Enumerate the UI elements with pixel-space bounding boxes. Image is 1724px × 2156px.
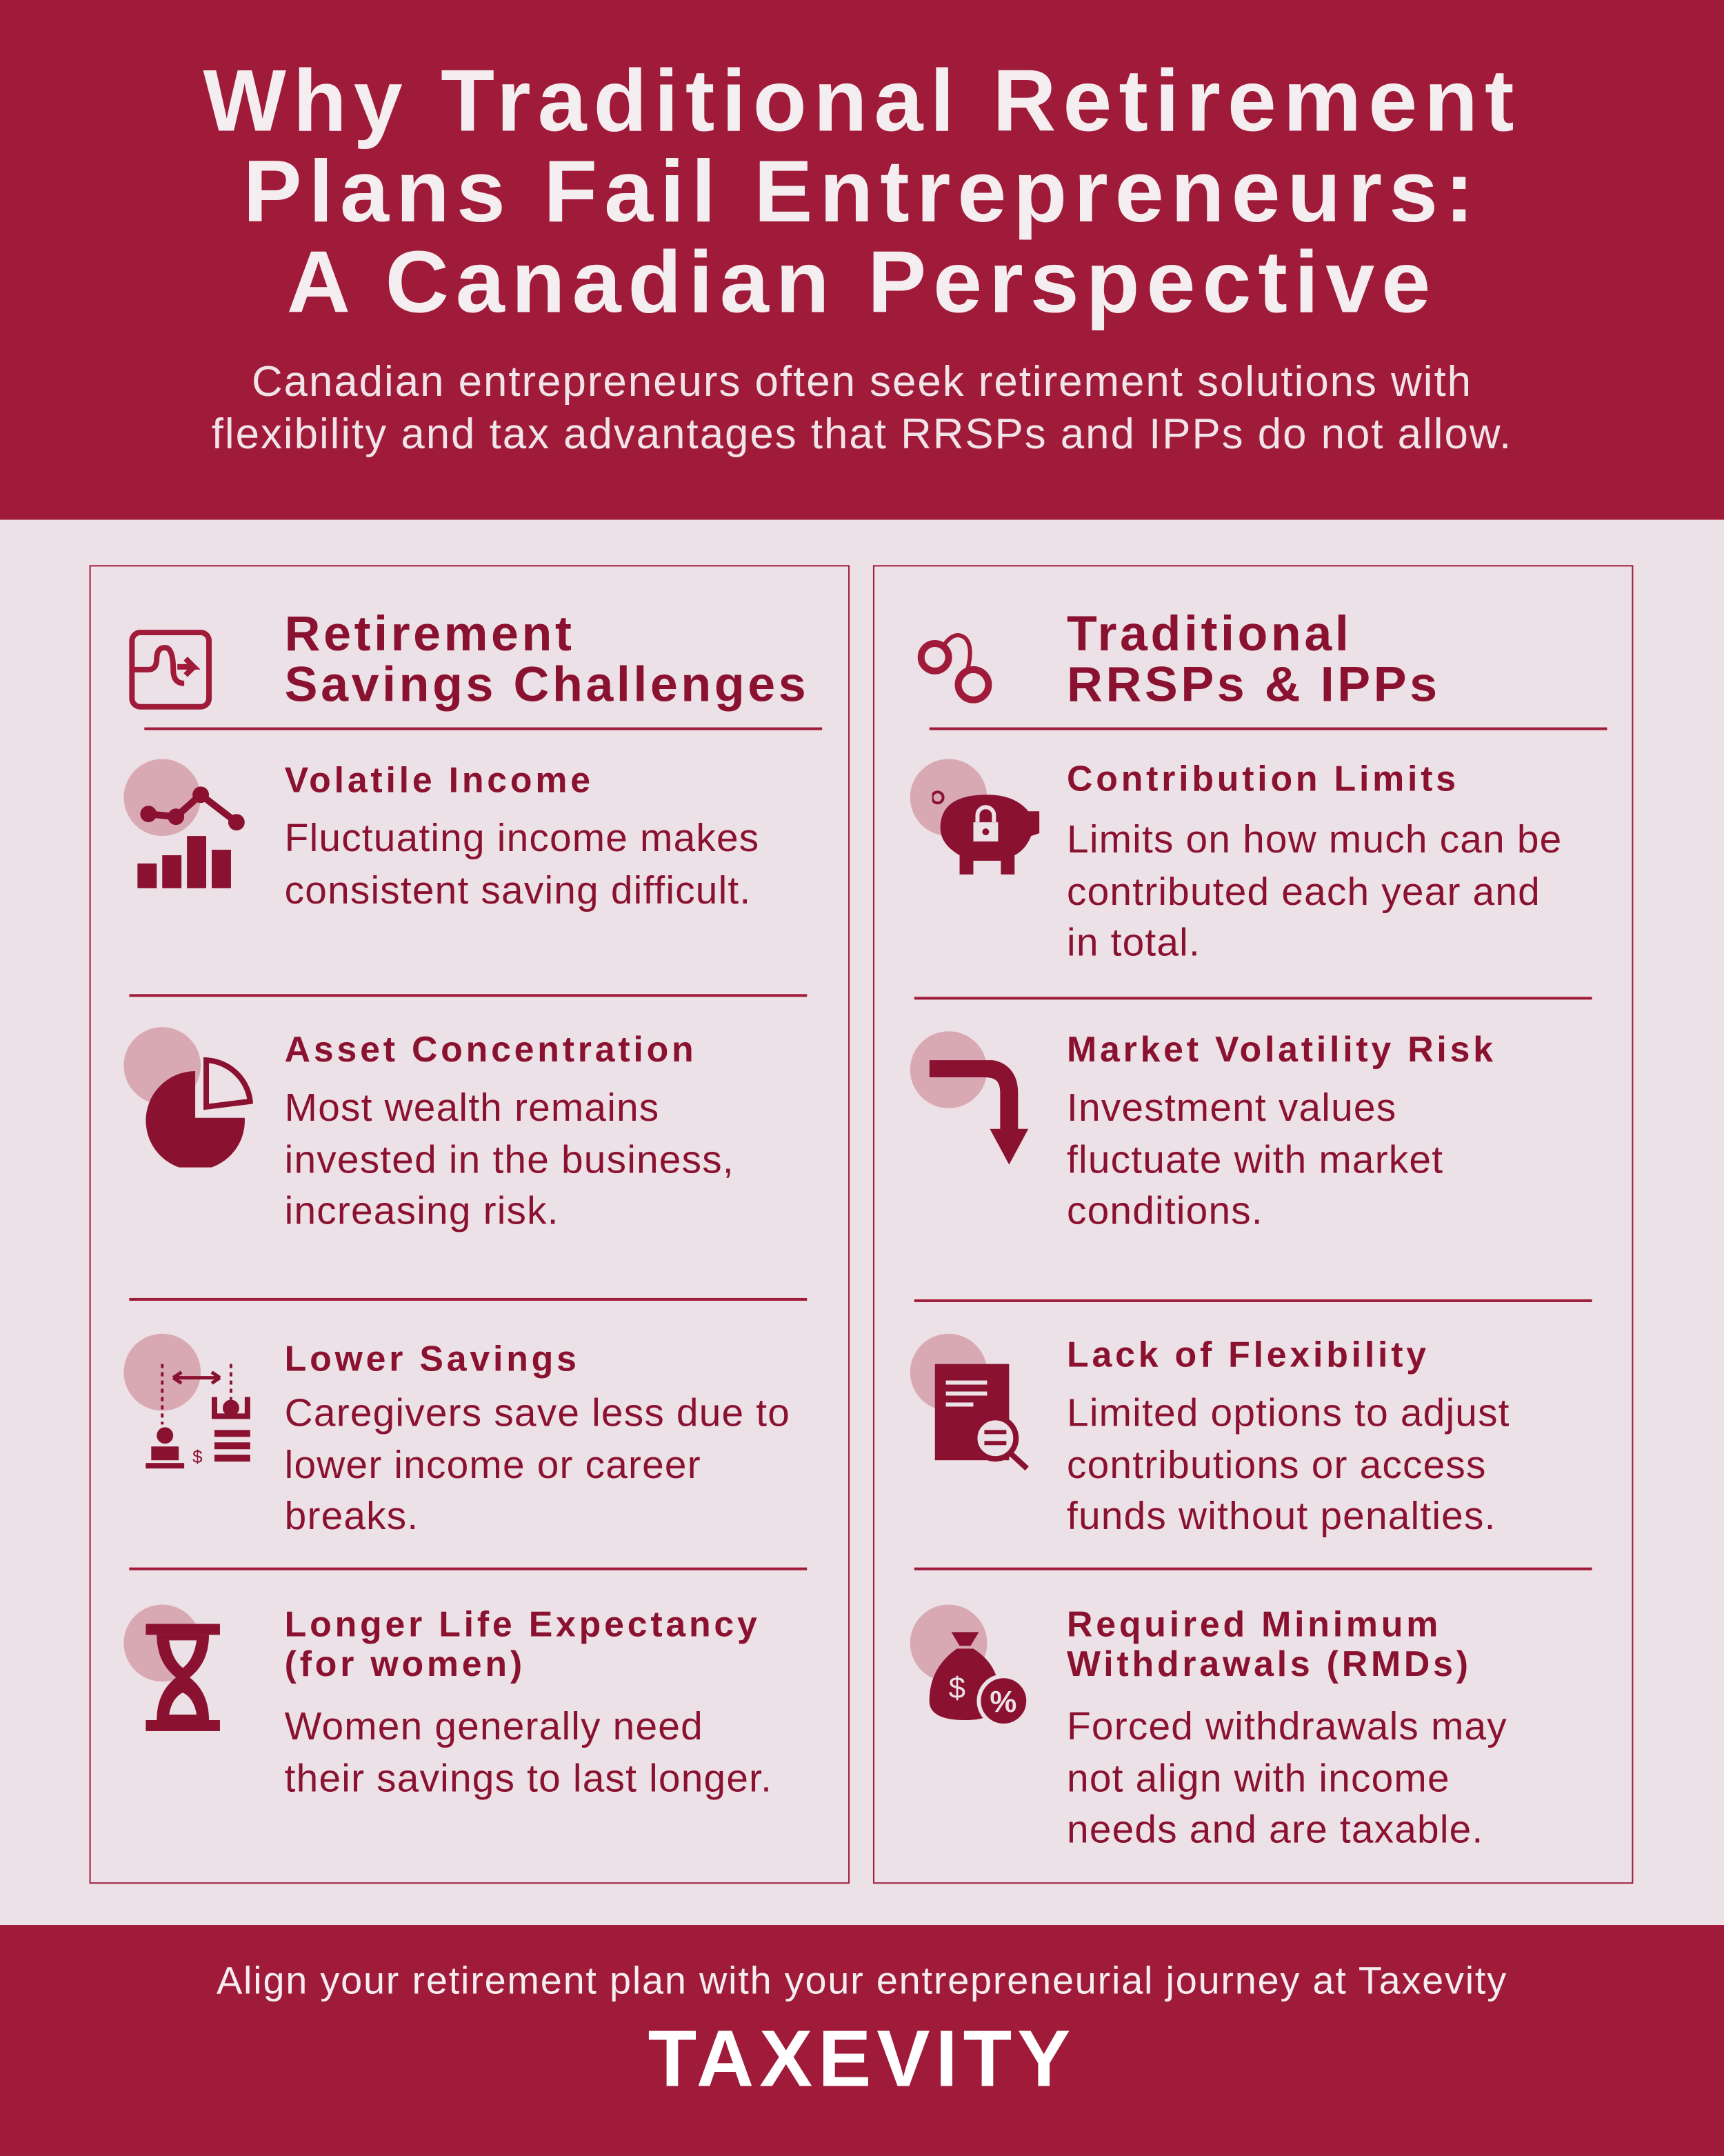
item: required minimum withdrawals: Required Minimum [1067, 1604, 1441, 1644]
item: lack of flexibility: contributions or access [1067, 1443, 1487, 1487]
subtitle: flexibility and tax advantages that RRSPs and IPPs do not allow. [212, 410, 1512, 458]
item: asset concentration: Asset Concentration [285, 1028, 697, 1070]
panel: traditional RRSPs & IPPs [873, 565, 1633, 1884]
icon: people income gap: $ [192, 1448, 203, 1467]
item: contribution limits: in total. [1067, 921, 1201, 966]
item: required minimum withdrawals: Withdrawals (RMDs) [1067, 1643, 1472, 1684]
subtitle: Canadian entrepreneurs often seek retirement solutions with [252, 357, 1472, 406]
item: lower savings: lower income or career [285, 1443, 701, 1487]
item: lower savings [123, 1334, 790, 1539]
item: asset concentration: increasing risk. [285, 1189, 559, 1233]
item: contribution limits: contributed each year and [1067, 870, 1541, 914]
footer band [0, 1925, 1724, 2156]
item: asset concentration: invested in the business, [285, 1138, 734, 1181]
item: lower savings: breaks. [285, 1495, 419, 1539]
item: volatile income: Volatile Income [285, 759, 594, 800]
heading: retirement savings challenges: Retirement [285, 605, 574, 661]
item: asset concentration: Most wealth remains [285, 1086, 659, 1130]
heading: traditional RRSPs & IPPs: Traditional [1067, 605, 1352, 661]
icon: people income gap [146, 1364, 250, 1469]
heading: retirement savings challenges [285, 605, 809, 712]
item: market volatility risk: Market Volatility Risk [1067, 1028, 1496, 1070]
item: market volatility risk: fluctuate with market [1067, 1138, 1443, 1181]
item: contribution limits: Contribution Limits [1067, 757, 1459, 799]
heading: traditional RRSPs & IPPs: RRSPs & IPPs [1067, 656, 1441, 712]
heading: traditional RRSPs & IPPs [1067, 605, 1441, 712]
item: longer life expectancy: Longer Life Expectancy [285, 1604, 761, 1644]
item: market volatility risk: conditions. [1067, 1189, 1263, 1233]
item: market volatility risk: Investment values [1067, 1086, 1396, 1130]
item: required minimum withdrawals: needs and are taxable. [1067, 1808, 1483, 1852]
item: volatile income [123, 759, 759, 912]
icon: piggy bank lock [932, 790, 1040, 875]
icon: money bag percent [930, 1632, 1026, 1724]
item: contribution limits [910, 757, 1562, 966]
icon: chart arrow box [129, 630, 212, 710]
icon: hourglass [146, 1624, 220, 1731]
item: lack of flexibility: Limited options to adjust [1067, 1392, 1510, 1435]
icon: handcuffs [917, 633, 992, 703]
item: contribution limits: Limits on how much can be [1067, 818, 1562, 862]
icon: pie chart [146, 1057, 253, 1168]
item: longer life expectancy: Women generally need [285, 1705, 703, 1749]
subtitle [212, 357, 1512, 458]
item: lack of flexibility: Lack of Flexibility [1067, 1334, 1430, 1375]
heading: retirement savings challenges: Savings Challenges [285, 656, 809, 712]
item: market volatility risk [910, 1028, 1496, 1233]
item: required minimum withdrawals: Forced withdrawals may [1067, 1705, 1507, 1749]
item: lower savings: Caregivers save less due to [285, 1392, 790, 1435]
item: longer life expectancy: (for women) [285, 1643, 525, 1684]
item: asset concentration [123, 1027, 734, 1233]
item: lack of flexibility [910, 1334, 1510, 1539]
title: A Canadian Perspective [287, 232, 1437, 331]
title: Plans Fail Entrepreneurs: [243, 141, 1481, 241]
icon: money bag percent: $ [949, 1671, 965, 1705]
item: lack of flexibility: funds without penalties. [1067, 1495, 1496, 1539]
icon: document magnifier [935, 1364, 1029, 1470]
item: required minimum withdrawals: not align with income [1067, 1757, 1450, 1801]
item: required minimum withdrawals [910, 1604, 1507, 1852]
title [203, 51, 1521, 331]
item: lower savings: Lower Savings [285, 1338, 580, 1379]
item: longer life expectancy [123, 1604, 772, 1801]
icon: money bag percent: % [990, 1685, 1016, 1719]
logo: TAXEVITY: TAXEVITY [648, 2015, 1076, 2104]
footer text: Align your retirement plan with your entrepreneurial journey at Taxevity [217, 1959, 1507, 2002]
item: volatile income: consistent saving difficult. [285, 868, 751, 912]
title: Why Traditional Retirement [203, 51, 1521, 150]
icon: line and bars [137, 786, 245, 888]
item: longer life expectancy: their savings to last longer. [285, 1757, 772, 1801]
item: volatile income: Fluctuating income makes [285, 817, 759, 861]
header band [0, 0, 1724, 520]
icon: turn-down arrow [930, 1060, 1029, 1165]
panel: retirement savings challenges [90, 565, 850, 1884]
